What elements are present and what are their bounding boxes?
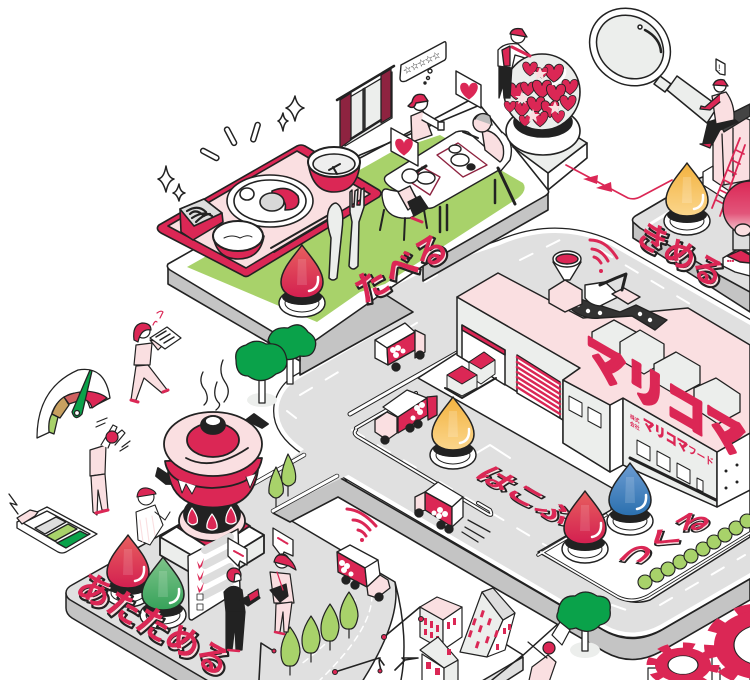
speech bubble with stars	[400, 42, 446, 84]
platform: lower-left ground (atatameru)	[66, 455, 396, 680]
panel: white block with buildings	[290, 493, 560, 680]
label: きめる: きめる	[632, 218, 733, 297]
logo: マリコマ on roof: マリコマ	[586, 317, 745, 472]
exclamation bubble: !	[718, 63, 721, 73]
label: つくる: つくる	[611, 509, 722, 573]
funnel machine	[549, 251, 582, 312]
steam	[201, 360, 228, 410]
main road network	[248, 233, 750, 660]
truck: upper road	[375, 323, 425, 371]
exclamation bubble	[716, 59, 725, 75]
wall rivets	[724, 464, 738, 490]
drop: tabemu red	[279, 245, 325, 317]
sign: company name on wall: マリコマ	[643, 415, 688, 456]
rice bowl	[213, 221, 264, 259]
dark green trees: centre	[236, 325, 316, 407]
pot on burner	[156, 412, 268, 585]
ladder	[712, 138, 745, 216]
speech bubble with stars: ☆☆☆☆☆	[402, 50, 442, 76]
label: はこぶ: はこぶ	[470, 464, 585, 531]
small house	[420, 637, 458, 680]
cutlery: spoon and fork	[327, 188, 364, 280]
tray with meal	[157, 145, 381, 276]
truck: at bay with open doors	[375, 390, 437, 444]
person: black suit with case	[224, 568, 260, 651]
label: たべる: たべる	[348, 227, 455, 311]
seated diner back view	[380, 169, 428, 240]
woman seated at back	[408, 94, 444, 142]
speech bubbles	[228, 528, 293, 566]
drop: hakobu yellow	[430, 397, 476, 469]
wifi signal: factory	[590, 240, 617, 272]
battery	[9, 494, 97, 553]
chopsticks	[271, 213, 335, 252]
stove base	[160, 495, 264, 585]
wifi signal: lower road	[347, 509, 376, 542]
dark green tree: bottom right	[557, 592, 610, 658]
gumball globe of hearts	[504, 54, 587, 190]
person: stretching	[90, 418, 130, 515]
place mat near diner	[412, 166, 440, 195]
sign: company name on wall: フード	[688, 443, 714, 470]
label: つくる: つくる	[610, 507, 721, 571]
gauge dial	[37, 369, 110, 438]
reader on books	[700, 80, 738, 148]
label: はこぶ: はこぶ	[468, 462, 583, 529]
light bulb	[723, 181, 750, 276]
logo extruded blocks	[592, 320, 740, 424]
locator pins and lines	[259, 607, 424, 680]
truck: lower road	[337, 545, 390, 601]
light green trees	[269, 454, 358, 675]
tall book stack	[703, 104, 750, 215]
production line on factory roof	[549, 251, 667, 330]
open loading bay	[462, 325, 505, 385]
magnifying glass	[574, 0, 718, 123]
place mat with dishes	[437, 143, 487, 177]
drop: atatameru green	[140, 557, 186, 629]
factory building	[457, 273, 750, 507]
sign: company name on wall: 会社	[630, 419, 640, 433]
window with curtains	[337, 66, 394, 148]
factory lot and tsukuru block	[355, 353, 750, 602]
kimeru platform	[632, 160, 750, 312]
side dish box	[180, 199, 223, 240]
books, ladder and reader	[700, 59, 750, 216]
person: woman with lanyard	[270, 554, 296, 634]
buildings on lower platform	[420, 588, 515, 680]
person: chef	[136, 488, 170, 545]
sparkles and shine marks	[158, 96, 304, 201]
pallets with boxes	[445, 352, 496, 398]
light bulb: ■■■	[727, 258, 735, 263]
sign: company name on wall: 株式	[630, 412, 640, 426]
heart flag	[391, 128, 418, 166]
robot arm	[600, 274, 640, 304]
flames	[188, 507, 236, 530]
tabemu platform	[167, 100, 549, 375]
office building	[420, 597, 462, 650]
person: waving near buildings	[528, 622, 570, 680]
gears	[648, 608, 750, 680]
soup bowl	[308, 147, 360, 192]
conveyor belts	[568, 282, 667, 330]
heart flag	[456, 71, 481, 108]
tilted tower	[460, 588, 515, 657]
sign: company name on wall	[630, 412, 714, 470]
label: たべる: たべる	[350, 229, 457, 313]
dinner plate	[227, 175, 313, 227]
red shutter	[517, 355, 560, 418]
older man eating	[463, 114, 515, 204]
windows	[569, 396, 716, 500]
person: carrying tray	[131, 311, 181, 402]
hedge of round shrubs	[638, 514, 750, 589]
pipeline arrow	[566, 165, 672, 199]
drop: tsukuru blue	[607, 463, 653, 535]
label: きめる: きめる	[630, 215, 731, 294]
checklist board	[188, 529, 240, 620]
drop: atatameru red	[105, 535, 151, 607]
worker leaning on globe	[498, 29, 530, 98]
drop: kimeru yellow	[664, 163, 710, 235]
table with diners	[380, 42, 515, 240]
truck: hakobu road	[415, 482, 490, 542]
drop: tsukuru red	[562, 491, 608, 563]
